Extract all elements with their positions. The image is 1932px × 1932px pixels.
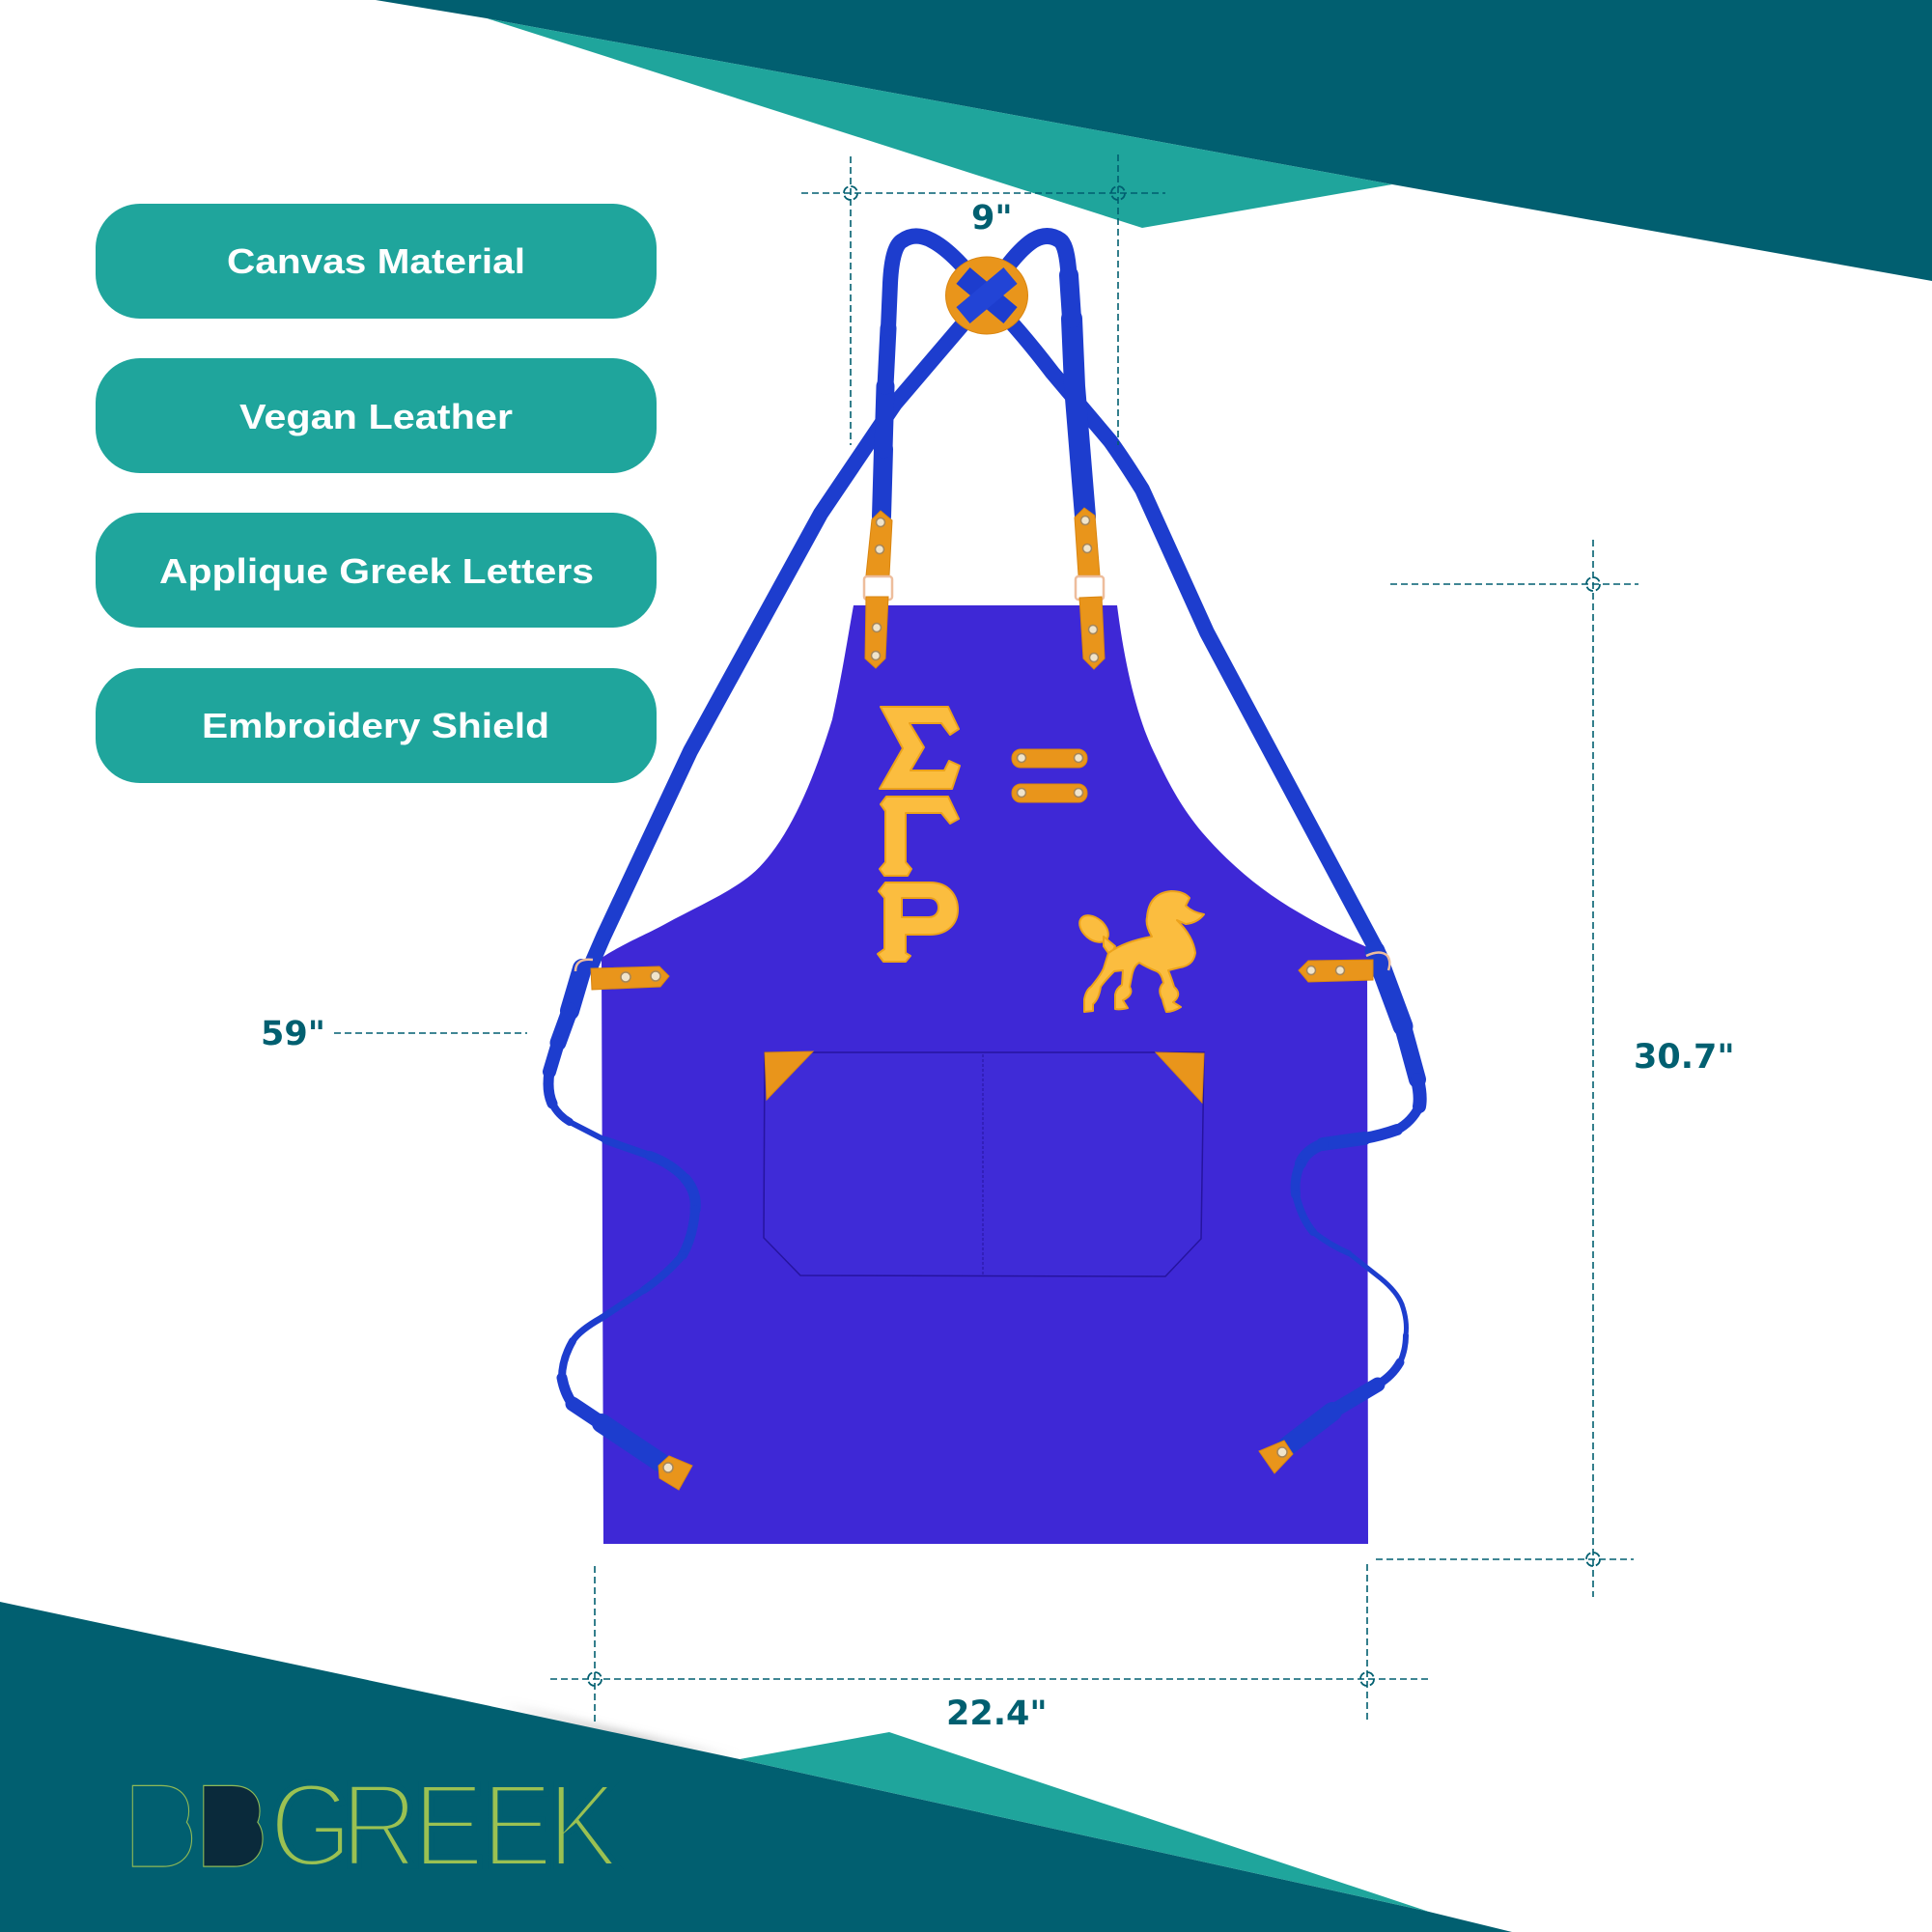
dimension: strap width 9 inches — [801, 154, 1165, 445]
dimension: height 30.7 inches: 30.7" — [1634, 1038, 1735, 1077]
shoulder straps — [882, 236, 1085, 517]
pill: canvas material: Canvas Material — [227, 241, 525, 281]
leather tab: right shoulder — [1075, 508, 1105, 669]
pill: embroidery shield: Embroidery Shield — [202, 706, 549, 745]
dimension: width 22.4 inches: 22.4" — [946, 1694, 1048, 1733]
pill: applique greek letters — [96, 513, 657, 628]
feature pills — [96, 204, 657, 783]
apron body — [602, 605, 1368, 1544]
dimension: width 22.4 inches — [550, 1564, 1429, 1733]
bottom background shape: dark teal — [0, 1602, 1512, 1932]
top background shape: light teal — [487, 18, 1392, 228]
dimension: height 30.7 inches — [1376, 540, 1735, 1597]
apron pocket — [764, 1051, 1204, 1276]
neck strap diagonals — [591, 296, 1380, 966]
dimension: strap length 59 inches: 59" — [261, 1015, 325, 1053]
leather tab: left shoulder — [864, 511, 892, 668]
logo: BB Greek: GREEK — [269, 1759, 619, 1891]
bottom shadow edge — [502, 1705, 740, 1759]
logo: BB Greek: B — [208, 1780, 256, 1873]
leather tip: left tie — [658, 1456, 692, 1490]
pill: applique greek letters: Applique Greek Letters — [159, 551, 594, 591]
apron — [548, 236, 1420, 1544]
poodle applique — [1075, 891, 1204, 1012]
left waist tie — [548, 968, 695, 1462]
pill: embroidery shield — [96, 668, 657, 783]
leather tab: right side — [1299, 952, 1389, 982]
pill: vegan leather: Vegan Leather — [239, 397, 513, 436]
pill: canvas material — [96, 204, 657, 319]
leather tab: left side — [575, 960, 669, 990]
leather loops — [1012, 749, 1087, 802]
top background shape: dark teal — [376, 0, 1932, 281]
logo: BB Greek: BB — [137, 1780, 256, 1873]
bottom background shape: light teal — [740, 1732, 1429, 1912]
cross patch — [946, 257, 1027, 334]
logo: BB Greek: B — [137, 1780, 185, 1873]
greek letter appliques — [878, 707, 960, 962]
pill: vegan leather — [96, 358, 657, 473]
leather tip: right tie — [1259, 1441, 1293, 1473]
dimension: strap width 9 inches: 9" — [971, 199, 1013, 238]
right waist tie — [1287, 951, 1420, 1446]
